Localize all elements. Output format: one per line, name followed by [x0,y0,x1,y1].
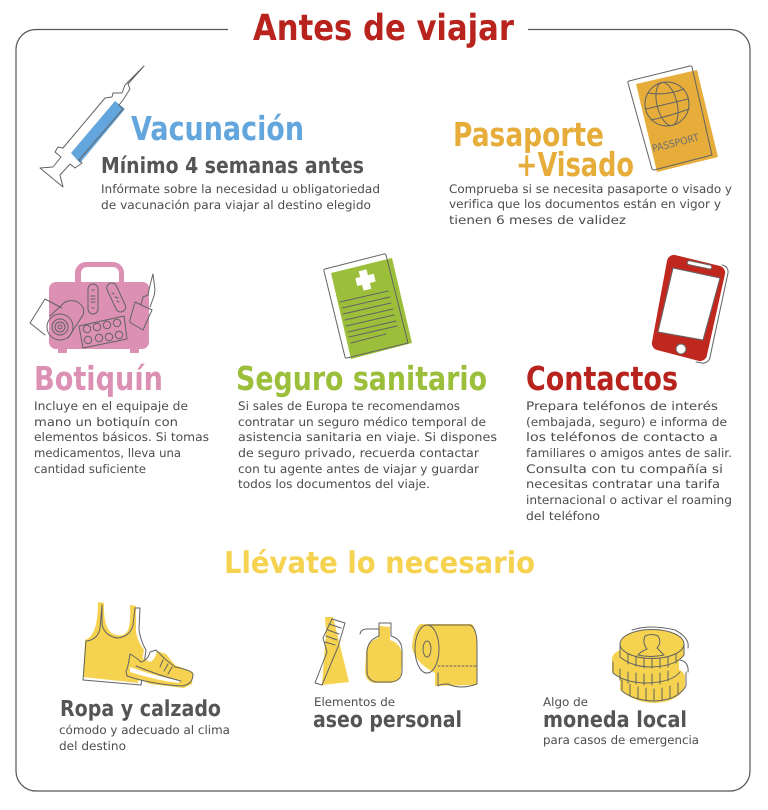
text block: del destino [59,739,126,753]
icon: medical document [324,254,412,359]
coin: top [620,627,688,672]
panel: pasaporte [449,66,732,227]
text block: de vacunación para viajar al destino elegido [101,198,371,212]
panel: botiquín [30,262,209,476]
heading: +Visado [516,145,634,184]
text block [449,182,732,227]
panel: aseo personal [313,617,477,733]
icon: passport [628,66,718,172]
heading: aseo personal [313,708,462,733]
panel: moneda local [543,627,699,747]
icon: white cross [354,268,377,292]
text block: mano un botiquín con [34,415,178,429]
icon: tank top and shoe [83,602,193,688]
icon: toilet paper [412,624,477,687]
text label: Elementos de [314,695,395,709]
text block [101,182,380,212]
heading: Contactos [526,359,678,398]
text block: tienen 6 meses de validez [449,213,626,227]
text block: elementos básicos. Si tomas [34,430,209,444]
text block: del teléfono [526,509,600,523]
text block: (embajada, seguro) e informa de [526,415,727,429]
text block: contratar un seguro médico temporal de [238,415,486,429]
heading: Seguro sanitario [236,359,487,398]
text block: cantidad suficiente [34,462,146,476]
panel: seguro sanitario [236,254,497,491]
panel: contactos [526,255,732,523]
title: Antes de viajar [253,8,514,49]
text block: Si sales de Europa te recomendamos [238,399,460,413]
text block [238,399,497,491]
text block: verifica que los documentos están en vigor y [449,197,721,211]
icon: soap dispenser [360,623,402,683]
text block [526,399,732,523]
icon: syringe [40,66,144,187]
text block: Incluye en el equipaje de [34,399,188,413]
subheading: Mínimo 4 semanas antes [101,154,364,179]
heading: Ropa y calzado [60,697,221,722]
heading: moneda local [543,708,687,733]
text block: Comprueba si se necesita pasaporte o visado y [449,182,732,196]
text block: cómodo y adecuado al clima [59,723,230,737]
text block: familiares o amigos antes de salir. [526,446,732,460]
text block: con tu agente antes de viajar y guardar [238,462,479,476]
text block: de seguro privado, recuerda contactar [238,446,479,460]
text block: medicamentos, lleva una [34,446,181,460]
heading: Botiquín [34,359,163,398]
panel: vacunación [40,66,380,212]
text block [59,723,230,753]
text block: los teléfonos de contacto a [526,430,718,444]
icon: smartphone [652,255,728,363]
icon: passport: PASSPORT [651,132,701,155]
heading: Vacunación [131,109,304,148]
text block: Consulta con tu compañía si [526,462,723,476]
text block: internacional o activar el roaming [526,493,732,507]
text block: necesitas contratar una tarifa [526,477,720,491]
text block: Prepara teléfonos de interés [526,399,718,413]
icon: coins [612,627,688,703]
heading: llévate lo necesario: Llévate lo necesario [224,546,535,581]
text block: para casos de emergencia [543,733,699,747]
panel: ropa y calzado [59,602,230,753]
coin: bottom [619,664,686,703]
coin: middle [612,645,680,685]
text block: asistencia sanitaria en viaje. Si dispones [238,430,497,444]
icon: first aid case [30,262,155,353]
text block [34,399,209,476]
icon: toothbrush [315,617,349,685]
text label: Algo de [543,695,588,709]
text block: todos los documentos del viaje. [238,477,430,491]
text block: Infórmate sobre la necesidad u obligatoriedad [101,182,380,196]
heading [453,115,634,184]
heading: Pasaporte [453,115,604,154]
